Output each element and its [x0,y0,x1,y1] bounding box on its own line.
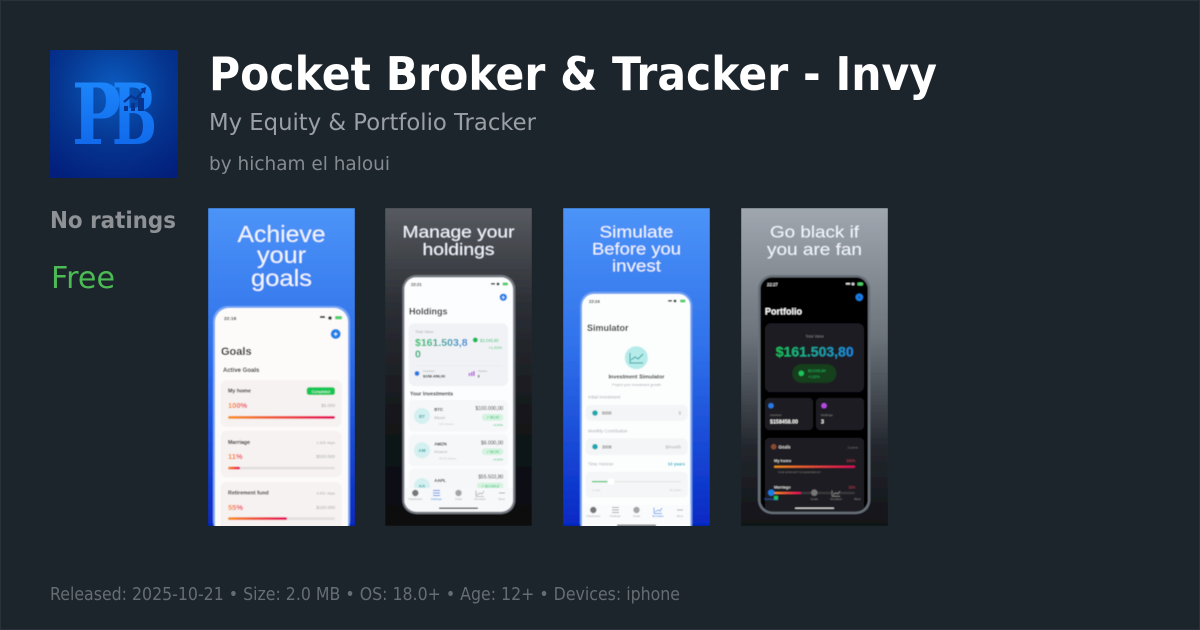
goal card: my home: $5.000 [321,403,335,408]
goals card: My home [774,458,792,463]
total value card [765,323,864,392]
total value card: 0 [415,348,421,360]
rating: No ratings [50,208,176,234]
field: monthly contribution: $/month [665,444,682,449]
tab bar: Holdings [431,497,442,501]
simulator heading: Investment Simulator [609,375,665,381]
goals card: Goals [778,444,791,450]
tab bar [582,505,690,526]
goal card: retirement fund: 55% [228,503,243,512]
caption: you are fan [767,240,862,259]
phone: 22:27 [767,282,778,287]
investment: BTC: BT [419,414,425,419]
goals card: 100% [846,459,855,463]
total value card: +1,92% [808,375,820,379]
investment: BTC: BTC [434,407,443,412]
investment: AAPL: AA [419,484,426,488]
field: time horizon slider: 1 year [592,488,600,492]
caption [402,223,515,259]
caption: goals [251,265,312,291]
phone: 22:24 [589,299,600,304]
field: monthly contribution: 3008 [602,444,612,449]
phone: 22:21 [411,282,422,287]
investment: AMZN: +0,00% [493,457,503,461]
investment: BTC: 100 shares [439,422,454,426]
investment: BTC: +0,00% [493,423,503,427]
developer: by hicham el haloui [209,153,390,175]
goal card: my home: My home [228,389,251,395]
caption: Achieve [238,221,326,247]
tab bar: More [499,497,505,501]
field: monthly contribution [586,428,688,455]
phone: + [858,295,862,301]
phone [213,306,350,538]
investment: BTC: Bitcoin [434,416,445,420]
phone: Holdings [409,306,448,316]
goal card: retirement fund: 3.651 days [316,492,335,496]
investment: BTC: ↗ $0,00 [486,416,499,420]
stat card: invested: Invested [770,413,782,417]
goals card: Goal achieved! Congratulations! [778,470,821,474]
goal card: retirement fund: $100.000 [316,505,335,510]
tab bar: Simulator [652,514,664,518]
total value card: Invested [423,369,435,373]
total value card: $3.045,80 [808,368,827,373]
goal card: retirement fund [222,483,341,526]
icon: simulator chart [625,346,648,369]
field: initial investment: Initial Investment [588,395,621,400]
caption: Before you [592,240,681,259]
total value card: Assets [478,369,488,373]
phone: 22:18 [224,316,237,322]
caption: Manage your [402,223,515,242]
screenshot 2: holdings [385,208,532,526]
investment: AMZN: 30.00 shares [439,456,457,460]
stat card: holdings: 3 [821,420,824,426]
investment: AAPL: ↗ $3.045,8 [481,484,499,488]
stat card: invested: $158458.00 [770,420,798,426]
total value card: Total Value [805,334,824,338]
tab bar: Dashboard [764,497,779,501]
tab bar: Dashboard [408,497,423,501]
tab bar: Goals [811,497,819,501]
app icon: PB logo [50,50,178,178]
field: time horizon slider [588,462,686,492]
field: time horizon slider: 10 years [668,462,686,467]
caption [238,221,326,291]
goal card: marriage: Marriage [228,440,250,446]
metadata footer: Released: 2025-10-21 • Size: 2.0 MB • OS: 18.0+ • Age: 12+ • Devices: iphone [50,584,680,605]
caption: Simulate [600,223,674,242]
tab bar: More [854,497,861,501]
investment: BTC: $100.000,00 [475,406,504,412]
screenshot 3: simulator [563,208,710,539]
field: initial investment [586,395,688,421]
investment: AAPL: AAPL [434,478,446,483]
simulator subheading: Project your investment growth [612,383,661,387]
investment: AMZN: ↗ $0,00 [486,450,499,454]
goal card: marriage: 1.825 days [316,441,335,445]
tab bar: Simulator [474,497,486,501]
tab bar: Goals [455,497,463,501]
total value card: Total Value [415,330,434,334]
total value card: +1,92% [488,345,502,350]
field: initial investment: 5000 [602,411,612,416]
goal card: my home [221,380,342,427]
total value card [409,323,508,386]
goal card: my home: Completed [312,390,330,394]
tab bar: Simulator [830,497,842,501]
app icon: PB logo: B [112,65,157,164]
investment: AMZN: $6.000,00 [481,440,504,446]
field: initial investment: $ [679,411,682,416]
goals card: 2 active [848,446,858,450]
investment: BTC [414,405,504,427]
goal card: marriage [221,431,342,477]
phone: Simulator [587,323,629,333]
total value card: $161.503,8 [415,337,468,349]
subtitle: My Equity & Portfolio Tracker [209,110,537,136]
goal card: my home: 100% [228,401,248,410]
goal card: marriage: $500.000 [316,454,335,459]
stat card: holdings [816,398,864,430]
tab bar [404,488,513,512]
caption: Go black if [770,223,859,242]
field: monthly contribution: Monthly Contribution [588,428,628,433]
caption: invest [612,257,661,276]
price: Free [51,261,115,296]
investment: AAPL [414,474,504,488]
phone: Active Goals [223,368,260,374]
field: time horizon slider: Time Horizon [588,462,614,467]
stat card: invested [765,398,813,430]
tab bar [764,490,861,509]
investment: AMZN: AM [418,448,426,453]
goal card: retirement fund: Retirement fund [228,491,269,497]
goals card [765,438,864,518]
investment: AAPL: $55.503,80 [478,475,504,481]
stat card: holdings: Holdings [821,413,833,417]
investment: AMZN: Amazon [434,450,447,454]
tab bar: Dashboard [586,514,601,518]
caption: your [257,242,306,268]
app icon: PB logo: P [72,65,121,164]
caption: holdings [422,240,494,259]
caption [592,223,681,276]
total value card: $3.045,80 [480,338,499,343]
tab bar: More [677,514,684,518]
goal card: marriage: 11% [228,452,243,461]
field: time horizon slider: 30 years [669,488,681,492]
tab bar: Holdings [610,514,621,518]
goals card: Marriage [774,485,791,490]
total value card: 3 [478,374,480,378]
total value card: $161.503,80 [776,344,854,360]
investment: AMZN [414,440,504,462]
tab bar: Goals [633,514,641,518]
title: Pocket Broker & Tracker - Invy [209,47,937,101]
phone [758,275,870,518]
phone [402,275,515,514]
phone [580,292,692,539]
phone: + [334,331,338,338]
total value card: $158.458,00 [423,374,446,378]
phone: Your Investments [410,392,453,398]
goals card: 11% [848,486,855,490]
screenshot 1: goals [208,208,355,542]
phone: + [502,295,506,301]
investment: AMZN: AMZN [434,441,447,446]
screenshot 4: dark mode portfolio [741,208,888,526]
phone: Goals [221,346,252,358]
phone: Portfolio [765,306,802,316]
caption [767,223,862,259]
